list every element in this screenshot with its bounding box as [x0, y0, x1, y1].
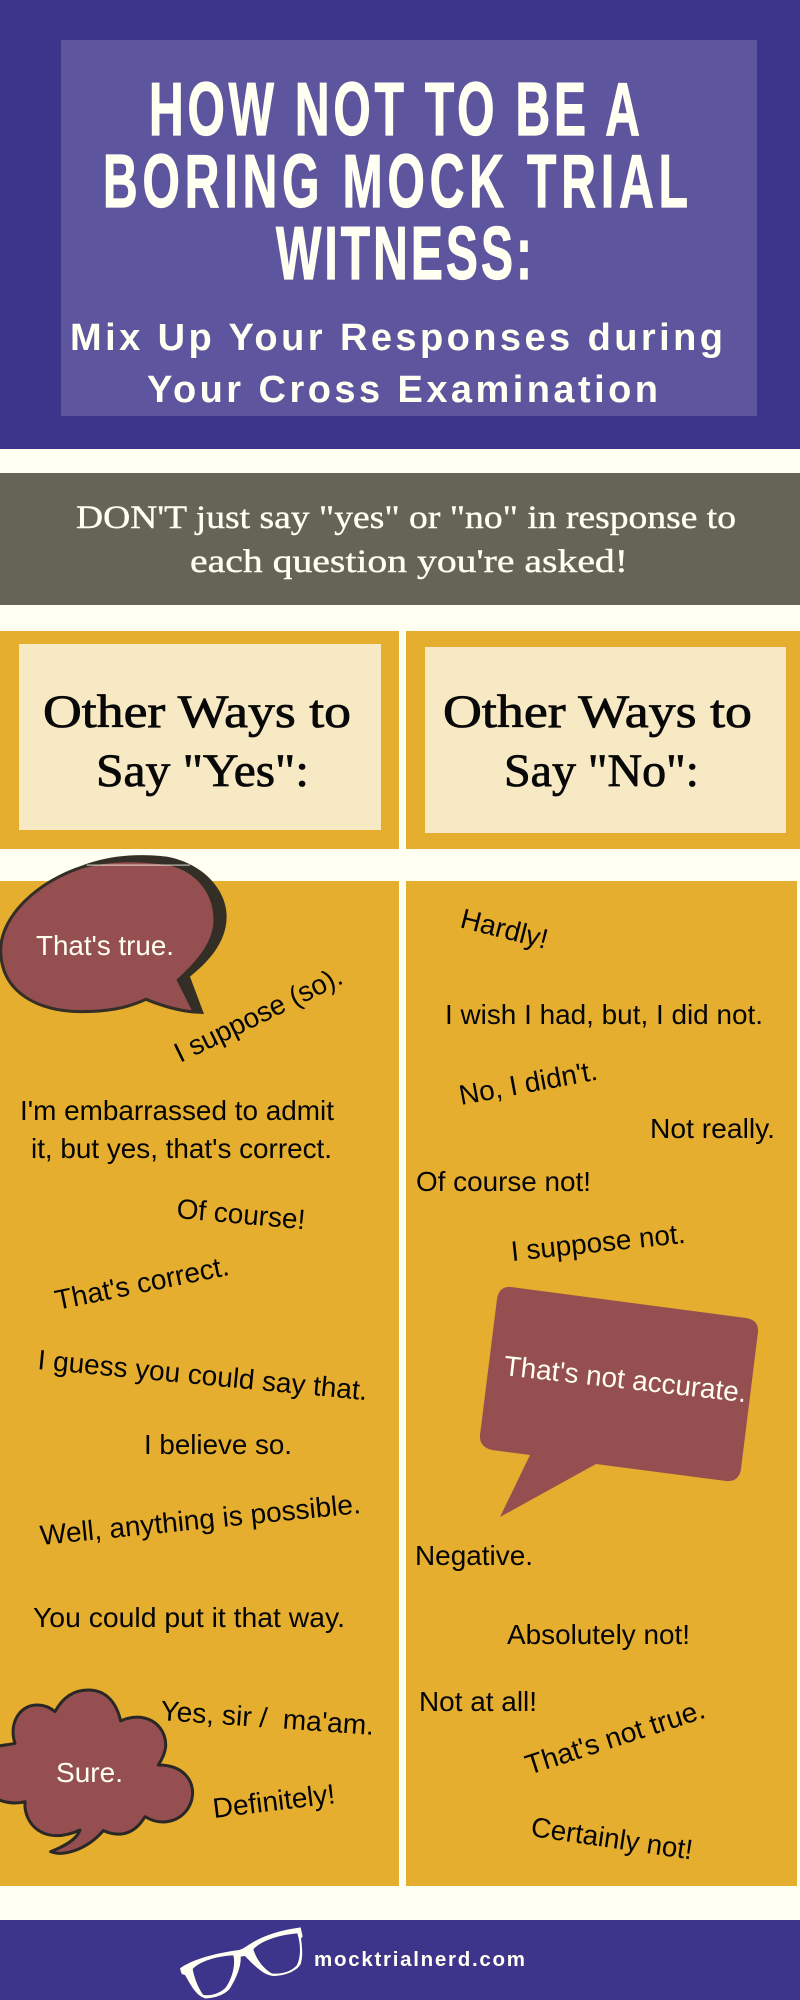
panel: no responses background — [406, 881, 797, 1886]
panel: yes heading: Other Ways to — [43, 686, 351, 738]
subtitle: Mix Up Your Responses during — [70, 317, 723, 359]
subtitle — [70, 317, 723, 411]
title panel — [61, 40, 757, 416]
title: WITNESS: — [276, 212, 532, 296]
icon: glasses — [180, 1927, 303, 1998]
responses: no column: Absolutely not! — [507, 1619, 690, 1650]
warning banner: DON'T just say "yes" or "no" in response to — [76, 500, 736, 536]
responses: no column: Hardly! — [458, 903, 551, 955]
responses: yes column: Well, anything is possible. — [39, 1488, 362, 1551]
responses: yes column: Definitely! — [211, 1778, 337, 1824]
title: HOW NOT TO BE A — [149, 68, 640, 152]
responses: yes column: Of course! — [175, 1193, 307, 1235]
panel: yes responses background — [0, 881, 399, 1886]
responses: no column: Certainly not! — [529, 1811, 695, 1865]
responses: no column: That's not true. — [521, 1693, 709, 1781]
thought cloud: sure: Sure. — [56, 1757, 123, 1788]
responses: yes column: You could put it that way. — [33, 1602, 345, 1633]
speech bubble: that's not accurate — [480, 1287, 758, 1517]
responses: no column: Negative. — [415, 1540, 533, 1571]
responses: no column: Of course not! — [416, 1166, 591, 1197]
panel: no heading — [406, 631, 800, 849]
responses: yes column — [20, 960, 375, 1824]
responses: yes column: I guess you could say that. — [36, 1344, 369, 1406]
panel: yes heading — [0, 631, 399, 849]
responses: no column: Not at all! — [419, 1686, 537, 1717]
panel: no heading: Say "No": — [504, 745, 699, 797]
footer bar — [0, 1920, 800, 2000]
panel: yes heading: Say "Yes": — [96, 745, 309, 797]
header banner — [0, 0, 800, 449]
responses: no column: I suppose not. — [509, 1218, 687, 1267]
responses: no column — [415, 903, 775, 1865]
warning banner — [0, 473, 800, 605]
speech bubble: that's true: That's true. — [36, 930, 174, 961]
warning banner: each question you're asked! — [190, 544, 628, 580]
responses: no column: No, I didn't. — [456, 1055, 600, 1111]
responses: no column: Not really. — [650, 1113, 775, 1144]
responses: yes column: That's correct. — [52, 1250, 232, 1316]
responses: yes column: I suppose (so). — [169, 960, 347, 1068]
subtitle: Your Cross Examination — [147, 369, 658, 411]
thought cloud: sure — [0, 1690, 193, 1853]
title: BORING MOCK TRIAL — [103, 140, 688, 224]
speech bubble: that's true — [1, 855, 227, 1014]
responses: yes column: Yes, sir / ma'am. — [160, 1695, 375, 1741]
speech bubble: that's not accurate: That's not accurate. — [502, 1350, 748, 1408]
responses: yes column: I'm embarrassed to admit — [20, 1095, 334, 1126]
title — [103, 68, 688, 296]
panel: no heading: Other Ways to — [443, 686, 752, 738]
responses: yes column: I believe so. — [144, 1429, 292, 1460]
responses: no column: I wish I had, but, I did not. — [445, 999, 763, 1030]
responses: yes column: it, but yes, that's correct. — [31, 1133, 332, 1164]
website: mocktrialnerd.com — [314, 1948, 525, 1971]
